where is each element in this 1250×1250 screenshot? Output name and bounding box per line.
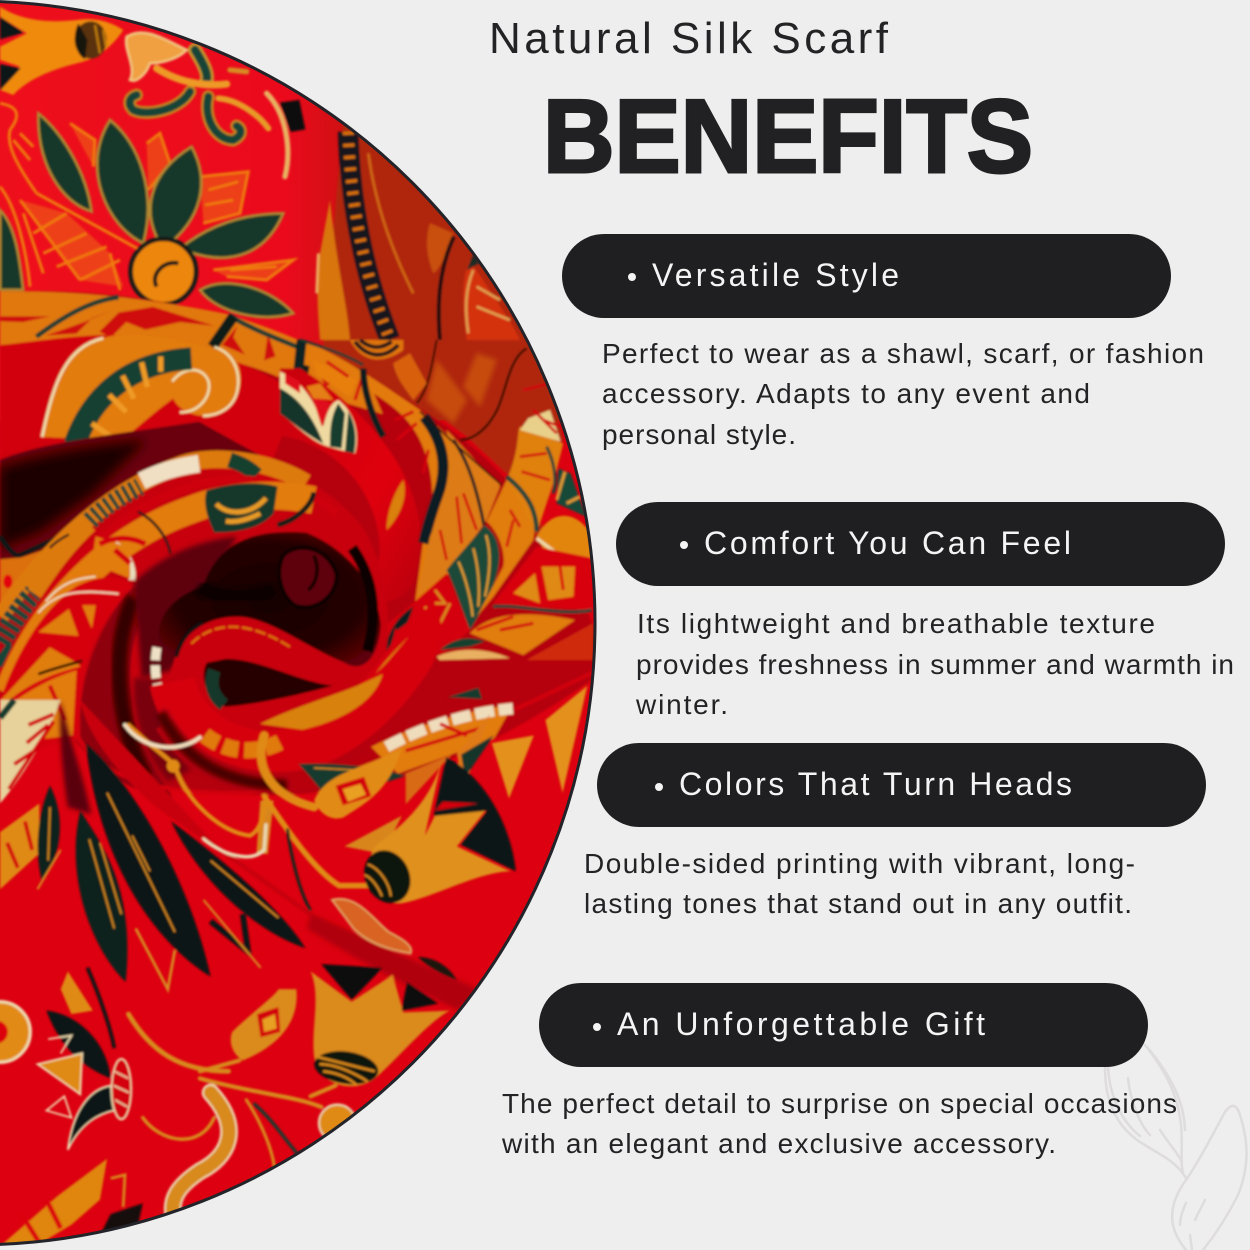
cream leaf — [0, 700, 61, 804]
panel: silk scarf photo circle — [0, 0, 600, 1250]
outer band — [0, 291, 383, 414]
text: Gift description — [501, 1088, 1177, 1159]
pill: Versatile Style: Versatile Style — [652, 257, 899, 293]
pill: Comfort You Can Feel — [616, 502, 1225, 586]
pill: Comfort You Can Feel: Comfort You Can Feel — [704, 525, 1071, 561]
pill: Colors That Turn Heads: Colors That Turn Heads — [679, 766, 1072, 802]
cream orange ring — [0, 459, 306, 617]
shadow around hole — [134, 536, 237, 678]
shadow at left — [0, 420, 259, 560]
text: Comfort description: winter. — [635, 689, 728, 720]
pill: An Unforgettable Gift: An Unforgettable Gift — [617, 1006, 985, 1042]
red chevron band — [387, 573, 470, 654]
flap shading — [80, 701, 368, 944]
small tulip — [314, 748, 402, 819]
right orange column — [477, 480, 537, 617]
tulip center — [231, 989, 297, 1061]
orange ring below — [8, 496, 314, 693]
deep shadow column — [80, 586, 172, 797]
orange outer strip — [297, 340, 500, 603]
circle outline — [0, 1, 595, 1245]
motif: upper fabric flowers — [0, 7, 520, 420]
dark leaves — [86, 743, 211, 977]
text: Versatile Style description: Perfect to wear as a shawl, scarf, or fashion — [602, 338, 1204, 369]
pill: An Unforgettable Gift — [539, 983, 1148, 1067]
text: Gift description: with an elegant and exclusive accessory. — [501, 1128, 1056, 1159]
right swirl folds — [280, 340, 593, 660]
pill: Versatile Style — [562, 234, 1171, 318]
fabric base — [0, 420, 594, 1243]
green striped leaf — [447, 525, 499, 630]
title: BENEFITS — [543, 79, 1033, 195]
swirl dark body — [0, 291, 600, 795]
right striped rib and folds — [317, 120, 520, 420]
text: Comfort description — [635, 608, 1234, 720]
ring orange tick — [387, 480, 405, 530]
large tulip — [369, 757, 511, 903]
motif: orange zigzag petals — [256, 686, 587, 854]
dark hole — [159, 532, 381, 667]
swirl and fold bands — [0, 291, 600, 795]
text: Versatile Style description: accessory. Adapts to any event and — [602, 378, 1090, 409]
red separator — [0, 479, 337, 682]
red ring — [280, 368, 420, 607]
text: Versatile Style description — [602, 338, 1204, 450]
text: Comfort description: provides freshness in summer and warmth in — [636, 649, 1234, 680]
text: Colors description: Double-sided printing with vibrant, long- — [584, 848, 1135, 879]
text: Versatile Style description: personal style. — [602, 419, 796, 450]
glossy second fold — [0, 332, 282, 460]
green leaf on ring — [280, 372, 357, 453]
bottom sweep — [77, 670, 597, 793]
motif: lower fabric with tulips — [0, 700, 516, 1246]
text: Colors description: lasting tones that stand out in any outfit. — [584, 888, 1132, 919]
inner curl — [170, 616, 311, 674]
text: Gift description: The perfect detail to surprise on special occasions — [502, 1088, 1177, 1119]
stems lower — [129, 1014, 336, 1221]
striped orange — [417, 430, 500, 597]
stems on flap — [125, 725, 368, 886]
lower tulip — [311, 971, 450, 1086]
inner swirl rings — [0, 459, 597, 797]
bottom left motifs — [0, 1159, 107, 1246]
text: Comfort description: Its lightweight and breathable texture — [637, 608, 1155, 639]
lower left red ring — [0, 578, 134, 758]
icon: faint leaf decoration — [1105, 1045, 1246, 1250]
text: Colors description — [584, 848, 1135, 919]
left flower — [0, 1002, 30, 1062]
leaves and ornament — [20, 123, 293, 287]
pill: Colors That Turn Heads — [597, 743, 1206, 827]
subtitle: Natural Silk Scarf — [489, 14, 889, 63]
navy stripe — [423, 417, 443, 543]
far right panels — [557, 468, 586, 517]
